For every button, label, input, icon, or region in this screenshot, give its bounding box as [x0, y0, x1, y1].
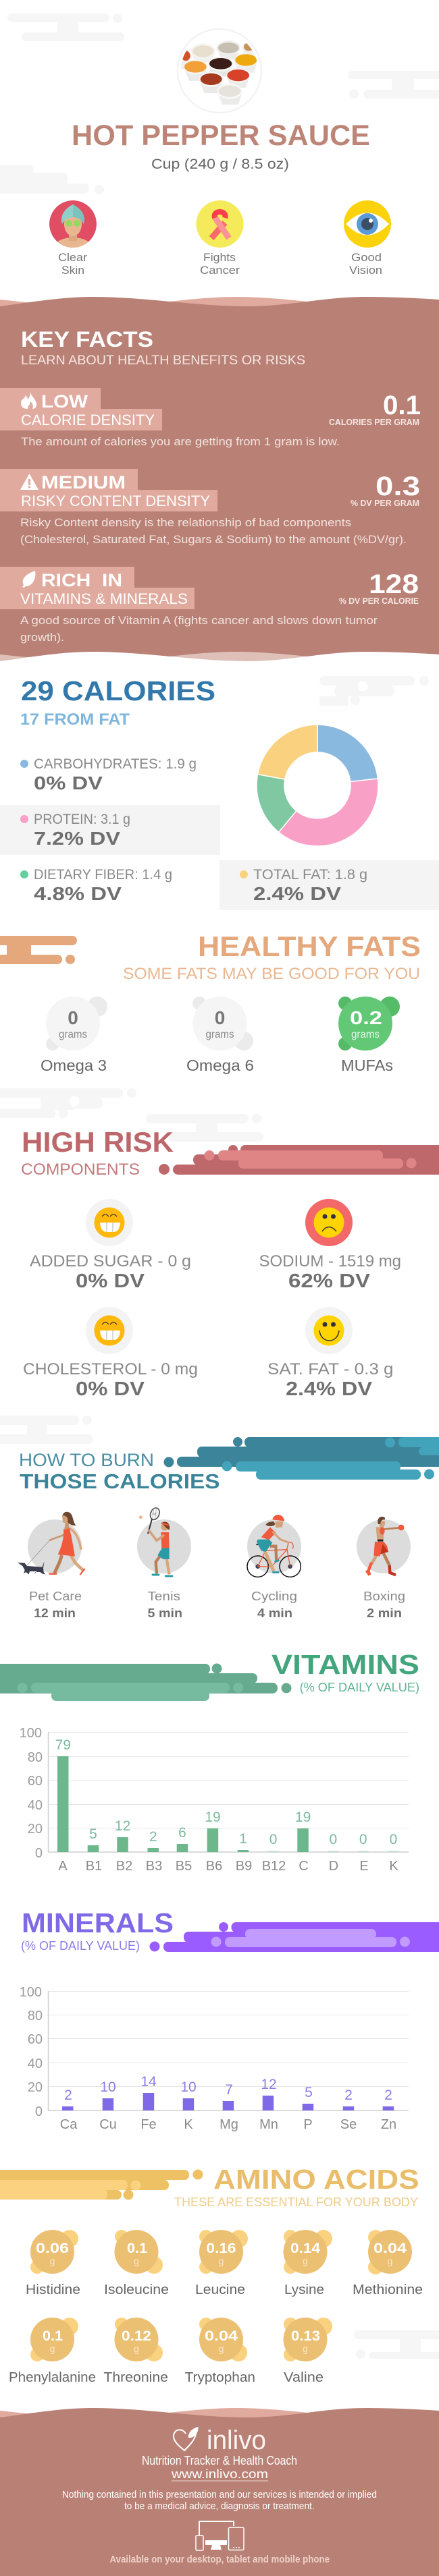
chart: minerals bar chart: Fe: [140, 2117, 157, 2132]
chart: vitamins bar chart: 0: [330, 1832, 337, 1847]
icon: good vision: [344, 200, 391, 248]
chart: minerals bar chart: Mn: [259, 2117, 278, 2132]
heading: healthy fats: HEALTHY FATS: [198, 930, 421, 962]
fact: low calorie density: [0, 388, 421, 448]
label: good vision: [349, 251, 382, 277]
badge: omega 6: grams: [205, 1029, 234, 1040]
description: [20, 516, 407, 546]
panel: vitamins: [0, 1649, 419, 1874]
risk: saturated fat: 2.4% DV: [286, 1378, 373, 1400]
legend: protein: PROTEIN: 3.1 g: [34, 812, 130, 827]
legend: dietary fiber: DIETARY FIBER: 1.4 g: [34, 867, 172, 883]
label: good vision: Vision: [349, 264, 382, 277]
label: clear skin: Skin: [61, 264, 84, 277]
panel: healthy fats: [0, 930, 421, 1074]
amino: valine: 0.13: [291, 2328, 320, 2344]
amino: lysine: [284, 2230, 332, 2297]
chart: minerals bar chart: 40: [28, 2056, 43, 2071]
amino: phenylalanine: 0.1: [43, 2328, 63, 2344]
icon: frown: [305, 1199, 353, 1246]
amino: leucine: Leucine: [195, 2283, 245, 2297]
amino: methionine: Methionine: [353, 2283, 423, 2297]
amino: threonine: 0.12: [122, 2328, 151, 2344]
chart: minerals bar chart: 14: [140, 2074, 157, 2090]
subheading: SOME FATS MAY BE GOOD FOR YOU: [123, 965, 420, 983]
description: (Cholesterol, Saturated Fat, Sugars & Sodium) to the amount (%DV/gr).: [20, 533, 407, 546]
chart: vitamins bar chart: 6: [178, 1825, 186, 1841]
website link: www.inlivo.com: [171, 2467, 268, 2481]
chart: vitamins bar chart: 19: [205, 1810, 221, 1825]
chart: minerals bar chart: 20: [28, 2080, 43, 2095]
label: risky content density: RISKY CONTENT DENSITY: [21, 493, 210, 509]
chart: vitamins bar chart: 80: [28, 1750, 43, 1765]
label: low: LOW: [41, 391, 88, 412]
fact: medium risky content density: [0, 469, 420, 546]
risk: saturated fat: SAT. FAT - 0.3 g: [267, 1360, 393, 1378]
label: medium: MEDIUM: [41, 472, 126, 493]
badge: mufas: [338, 997, 400, 1074]
panel: high risk: [21, 1126, 439, 1400]
subheading: key facts: LEARN ABOUT HEALTH BENEFITS OR RISKS: [21, 353, 305, 368]
heading: amino acids: AMINO ACIDS: [213, 2164, 419, 2195]
amino: isoleucine: Isoleucine: [104, 2283, 169, 2297]
description: [20, 614, 378, 644]
description: Risky Content density is the relationship of bad components: [20, 516, 351, 529]
disclaimer: Nothing contained in this presentation and our services is intended or implied: [62, 2490, 377, 2500]
chart: vitamins bar chart: B3: [146, 1859, 162, 1874]
label: clear skin: [58, 251, 87, 277]
icon: grin: [86, 1199, 133, 1246]
badge: mufas: 0.2: [350, 1007, 382, 1028]
chart: minerals bar chart: Mg: [220, 2117, 238, 2132]
chart: minerals bar chart: 60: [28, 2032, 43, 2047]
decorative cloud: top left: [7, 13, 124, 41]
chart: vitamins bar chart: B6: [206, 1859, 222, 1874]
amino: histidine: Histidine: [26, 2283, 80, 2297]
legend: total fat: [220, 860, 439, 910]
description: growth).: [20, 631, 64, 644]
panel: key facts: [0, 297, 439, 680]
risk: sodium: 62% DV: [288, 1270, 371, 1292]
chart: vitamins bar chart: 40: [28, 1798, 43, 1813]
chart: minerals bar chart: P: [303, 2117, 313, 2132]
icon: smile: [305, 1307, 353, 1354]
logo: inlivo wordmark: inlivo: [207, 2426, 266, 2455]
chart: vitamins bar chart: 5: [89, 1826, 97, 1842]
subheading: 17 from fat: 17 FROM FAT: [20, 710, 130, 729]
chart: minerals bar chart: Zn: [381, 2117, 396, 2132]
decorative cloud: [319, 676, 429, 706]
chart: vitamins bar chart: D: [329, 1859, 338, 1874]
legend: carbohydrates: 0% DV: [34, 773, 103, 793]
legend: dietary fiber: 4.8% DV: [34, 883, 122, 904]
chart: minerals bar chart: 10: [100, 2079, 116, 2095]
risk: added sugar: [30, 1199, 191, 1292]
chart: vitamins bar chart: A: [58, 1859, 68, 1874]
label: fights cancer: Fights: [203, 251, 236, 264]
risk: cholesterol: CHOLESTEROL - 0 mg: [23, 1360, 198, 1378]
banner shape: purple stripes: [150, 1922, 439, 1952]
decorative cloud: how to burn: [0, 1416, 93, 1444]
chart: macronutrient donut: [257, 725, 378, 846]
amino: tryptophan: Tryptophan: [185, 2370, 255, 2385]
badge: omega 3: [41, 997, 107, 1074]
chart: vitamins bar chart: 2: [149, 1829, 157, 1845]
amino: threonine: Threonine: [103, 2370, 168, 2385]
legend: protein: [0, 805, 220, 855]
heading: vitamins: VITAMINS: [272, 1649, 419, 1680]
amino: methionine: g: [388, 2256, 392, 2266]
chart: vitamins bar chart: C: [299, 1859, 309, 1874]
chart: vitamins bar chart: 60: [28, 1774, 43, 1789]
heading: those calories: THOSE CALORIES: [20, 1469, 220, 1493]
chart: minerals bar chart: 2: [344, 2088, 353, 2103]
title: HOT PEPPER SAUCE: [72, 119, 370, 152]
risk: cholesterol: [23, 1307, 198, 1400]
amino: isoleucine: [104, 2230, 169, 2297]
amino: phenylalanine: [9, 2318, 96, 2385]
chart: minerals bar chart: 10: [180, 2079, 197, 2095]
badge: omega 3: Omega 3: [41, 1057, 107, 1074]
amino: tryptophan: 0.04: [205, 2328, 238, 2344]
activity: boxing: 2 min: [367, 1606, 402, 1620]
unit: % dv per calorie: % DV PER CALORIE: [339, 596, 419, 606]
activity: pet care: 12 min: [34, 1606, 76, 1620]
icon: tennis player: [137, 1507, 191, 1576]
heading: 29 calories: 29 CALORIES: [21, 675, 215, 706]
fact: rich in vitamins and minerals: [0, 567, 419, 644]
risk: added sugar: 0% DV: [76, 1270, 145, 1292]
amino: threonine: [103, 2318, 168, 2385]
chart: minerals bar chart: [20, 1985, 409, 2132]
description: A good source of Vitamin A (fights cancer and slows down tumor: [20, 614, 378, 627]
chart: vitamins bar chart: 12: [115, 1818, 130, 1834]
chart: vitamins bar chart: 0: [390, 1832, 397, 1847]
activity: tennis: 5 min: [147, 1606, 182, 1620]
availability note: Available on your desktop, tablet and mobile phone: [109, 2554, 330, 2565]
logo: heart and leaf: [174, 2427, 199, 2451]
activity: cycling: [247, 1515, 301, 1620]
amino: leucine: 0.16: [207, 2241, 236, 2256]
chart: minerals bar chart: Cu: [99, 2117, 117, 2132]
amino: lysine: g: [303, 2256, 308, 2266]
description: The amount of calories you are getting from 1 gram is low.: [21, 435, 340, 448]
activity: cycling: Cycling: [251, 1590, 297, 1603]
chart: minerals bar chart: 12: [261, 2077, 277, 2092]
decorative cloud: left of icons: [0, 165, 104, 194]
risk: cholesterol: 0% DV: [76, 1378, 145, 1400]
legend: total fat: 2.4% DV: [253, 883, 341, 904]
banner shape: green stripes: [0, 1664, 292, 1701]
decorative cloud: right of valine: [354, 2330, 439, 2359]
food image: bowls of sauce: [178, 29, 261, 113]
label: rich in: RICH IN: [41, 570, 122, 590]
legend: protein: 7.2% DV: [34, 828, 120, 849]
unit: % dv per gram: % DV PER GRAM: [351, 498, 419, 508]
subheading: components: COMPONENTS: [21, 1160, 140, 1179]
badge: mufas: grams: [351, 1029, 380, 1040]
panel: minerals: [20, 1907, 439, 2132]
value: 128: 128: [369, 569, 419, 599]
risk: saturated fat: [267, 1307, 393, 1400]
chart: vitamins bar chart: 19: [295, 1810, 311, 1825]
disclaimer: to be a medical advice, diagnosis or treatment.: [124, 2501, 315, 2512]
banner shape: teal stripes: [163, 1437, 439, 1480]
chart: vitamins bar chart: 20: [28, 1822, 43, 1837]
amino: methionine: [353, 2230, 423, 2297]
amino: valine: g: [303, 2343, 308, 2354]
risk: added sugar: ADDED SUGAR - 0 g: [30, 1252, 191, 1270]
icon: fights cancer: [196, 200, 243, 248]
panel: calories: [0, 675, 439, 910]
chart: minerals bar chart: 7: [225, 2082, 233, 2098]
risk: sodium: [259, 1199, 401, 1292]
chart: vitamins bar chart: B1: [86, 1859, 102, 1874]
subheading: THESE ARE ESSENTIAL FOR YOUR BODY: [174, 2195, 418, 2209]
risk: sodium: SODIUM - 1519 mg: [259, 1252, 401, 1270]
chart: vitamins bar chart: B5: [176, 1859, 192, 1874]
chart: vitamins bar chart: 100: [20, 1726, 42, 1741]
badge: mufas: MUFAs: [341, 1057, 393, 1074]
panel: amino acids: [0, 2164, 439, 2385]
amino: valine: Valine: [284, 2370, 324, 2385]
amino: histidine: 0.06: [36, 2241, 69, 2256]
icon: cyclist: [247, 1515, 301, 1577]
chart: vitamins bar chart: B9: [236, 1859, 252, 1874]
heading: how to burn: HOW TO BURN: [19, 1450, 154, 1470]
amino: leucine: g: [219, 2256, 224, 2266]
amino: lysine: Lysine: [284, 2283, 324, 2297]
amino: threonine: g: [134, 2343, 139, 2354]
label: clear skin: Clear: [58, 251, 87, 264]
amino: histidine: g: [50, 2256, 55, 2266]
heading: key facts: KEY FACTS: [21, 327, 153, 352]
badge: omega 3: 0: [68, 1007, 78, 1028]
activity: pet care: [18, 1512, 84, 1620]
amino: isoleucine: 0.1: [127, 2241, 147, 2256]
badge: omega 6: [186, 997, 254, 1074]
icon: flame: [21, 391, 36, 409]
chart: vitamins bar chart: 0: [359, 1832, 367, 1847]
chart: vitamins bar chart: B2: [116, 1859, 132, 1874]
amino: phenylalanine: Phenylalanine: [9, 2370, 96, 2385]
chart: minerals bar chart: 5: [305, 2085, 313, 2100]
legend: total fat: TOTAL FAT: 1.8 g: [253, 867, 367, 883]
chart: minerals bar chart: Ca: [60, 2117, 78, 2132]
amino: leucine: [195, 2230, 248, 2297]
disclaimer: [62, 2490, 377, 2512]
chart: vitamins bar chart: 79: [55, 1737, 71, 1753]
icon: boxer: [357, 1517, 411, 1575]
amino: methionine: 0.04: [373, 2241, 407, 2256]
icon: woman walking dog: [18, 1512, 84, 1575]
label: fights cancer: Cancer: [200, 264, 240, 277]
activity: pet care: Pet Care: [29, 1590, 82, 1603]
legend: carbohydrates: CARBOHYDRATES: 1.9 g: [34, 756, 197, 772]
icon: devices: [196, 2521, 244, 2550]
legend: carbohydrates: [20, 756, 197, 793]
value: 0.3: 0.3: [376, 472, 420, 501]
decorative cloud: left of high risk: [0, 1088, 136, 1118]
amino: valine: [284, 2318, 332, 2385]
unit: calories per gram: CALORIES PER GRAM: [329, 417, 419, 427]
label: vitamins and minerals: VITAMINS & MINERALS: [20, 590, 188, 607]
activity: boxing: Boxing: [363, 1590, 405, 1603]
serving size: Cup (240 g / 8.5 oz): [151, 157, 289, 172]
panel: how to burn: [18, 1437, 439, 1620]
value: 0.1: 0.1: [383, 391, 421, 420]
chart: vitamins bar chart: 1: [239, 1831, 247, 1847]
banner shape: red stripes: [159, 1145, 439, 1175]
amino: tryptophan: g: [219, 2343, 224, 2354]
amino: tryptophan: [185, 2318, 255, 2385]
activity: cycling: 4 min: [257, 1606, 292, 1620]
badge: omega 6: Omega 6: [186, 1057, 254, 1074]
chart: minerals bar chart: 0: [35, 2104, 43, 2119]
icon: clear skin: [49, 200, 97, 248]
subheading: (% OF DAILY VALUE): [21, 1938, 140, 1953]
chart: vitamins bar chart: E: [359, 1859, 369, 1874]
chart: minerals bar chart: K: [184, 2117, 193, 2132]
subheading: (% OF DAILY VALUE): [300, 1680, 419, 1694]
icon: leaf: [22, 571, 35, 588]
chart: minerals bar chart: 2: [384, 2088, 392, 2103]
chart: vitamins bar chart: [20, 1726, 409, 1874]
chart: vitamins bar chart: K: [389, 1859, 398, 1874]
activity: boxing: [357, 1517, 411, 1620]
banner shape: yellow stripes: [0, 2170, 203, 2200]
label: good vision: Good: [351, 251, 382, 264]
amino: lysine: 0.14: [290, 2241, 320, 2256]
amino: isoleucine: g: [134, 2256, 139, 2266]
decorative cloud: top right: [348, 71, 439, 99]
icon: grin: [86, 1307, 133, 1354]
badge: omega 6: 0: [215, 1007, 225, 1028]
panel: footer: [0, 2408, 439, 2576]
decorative cloud: behind high risk: [146, 1114, 263, 1142]
chart: vitamins bar chart: 0: [269, 1832, 277, 1847]
heading: high risk: HIGH RISK: [22, 1126, 174, 1158]
label: fights cancer: [200, 251, 240, 277]
banner shape: orange: [0, 936, 77, 964]
badge: omega 3: grams: [59, 1029, 87, 1040]
chart: minerals bar chart: 100: [20, 1985, 42, 2000]
legend: dietary fiber: [20, 867, 172, 904]
heading: minerals: MINERALS: [22, 1907, 174, 1938]
amino: phenylalanine: g: [50, 2343, 55, 2354]
chart: minerals bar chart: 2: [64, 2088, 72, 2103]
amino: histidine: [26, 2230, 80, 2297]
chart: minerals bar chart: Se: [340, 2117, 357, 2132]
label: calorie density: CALORIE DENSITY: [21, 412, 155, 428]
chart: minerals bar chart: 80: [28, 2009, 43, 2023]
activity: tennis: [137, 1507, 191, 1620]
tagline: Nutrition Tracker & Health Coach: [142, 2454, 297, 2467]
chart: vitamins bar chart: 0: [35, 1846, 43, 1861]
icon: warning triangle: [20, 474, 38, 490]
chart: vitamins bar chart: B12: [262, 1859, 286, 1874]
activity: tennis: Tenis: [147, 1590, 180, 1603]
